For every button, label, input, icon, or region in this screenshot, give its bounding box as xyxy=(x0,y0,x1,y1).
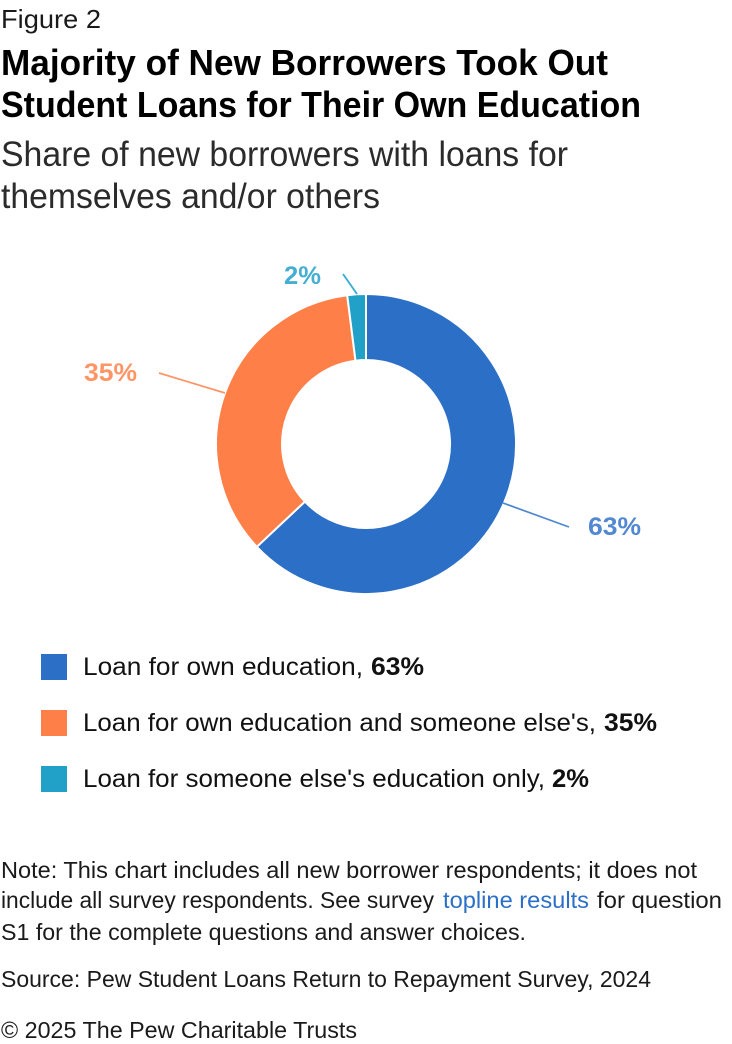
note: for question xyxy=(597,887,722,913)
legend item: own and someone else's: 35% xyxy=(604,709,657,737)
legend item: someone else's only: Loan for someone else's education only, xyxy=(83,765,545,793)
source: Source: Pew Student Loans Return to Repayment Survey, 2024 xyxy=(1,966,651,992)
legend item: own education: 63% xyxy=(371,653,424,681)
segment: loan for own education 63% xyxy=(257,294,516,594)
note: S1 for the complete questions and answer choices. xyxy=(1,919,526,945)
title: Majority of New Borrowers Took Out xyxy=(1,42,608,83)
note: Note: This chart includes all new borrower respondents; it does not xyxy=(1,857,698,883)
callout: 2%: 2% xyxy=(284,262,321,290)
callout: 35%: 35% xyxy=(84,359,137,387)
figure label: Figure 2 xyxy=(1,4,101,34)
legend item: own education xyxy=(41,653,424,681)
callout: 35% xyxy=(84,359,225,393)
callout: 63% xyxy=(503,503,641,541)
title: Student Loans for Their Own Education xyxy=(1,84,641,125)
note xyxy=(1,857,722,945)
note: topline results xyxy=(443,887,589,913)
subtitle: themselves and/or others xyxy=(1,177,380,216)
legend item: someone else's only: 2% xyxy=(552,765,589,793)
subtitle: Share of new borrowers with loans for xyxy=(1,135,568,174)
legend xyxy=(41,653,657,793)
callout: 2% xyxy=(284,262,357,294)
note: include all survey respondents. See survey xyxy=(1,887,434,913)
segment: someone else's education only 2% xyxy=(347,294,366,361)
callout: 63%: 63% xyxy=(588,513,641,541)
subtitle xyxy=(1,135,568,216)
legend item: own and someone else's: Loan for own education and someone else's, xyxy=(83,709,596,737)
legend item: own education: Loan for own education, xyxy=(83,653,363,681)
donut chart xyxy=(216,294,516,594)
segment: own education and someone else's 35% xyxy=(216,295,356,547)
title xyxy=(1,42,641,125)
copyright: © 2025 The Pew Charitable Trusts xyxy=(1,1017,357,1043)
